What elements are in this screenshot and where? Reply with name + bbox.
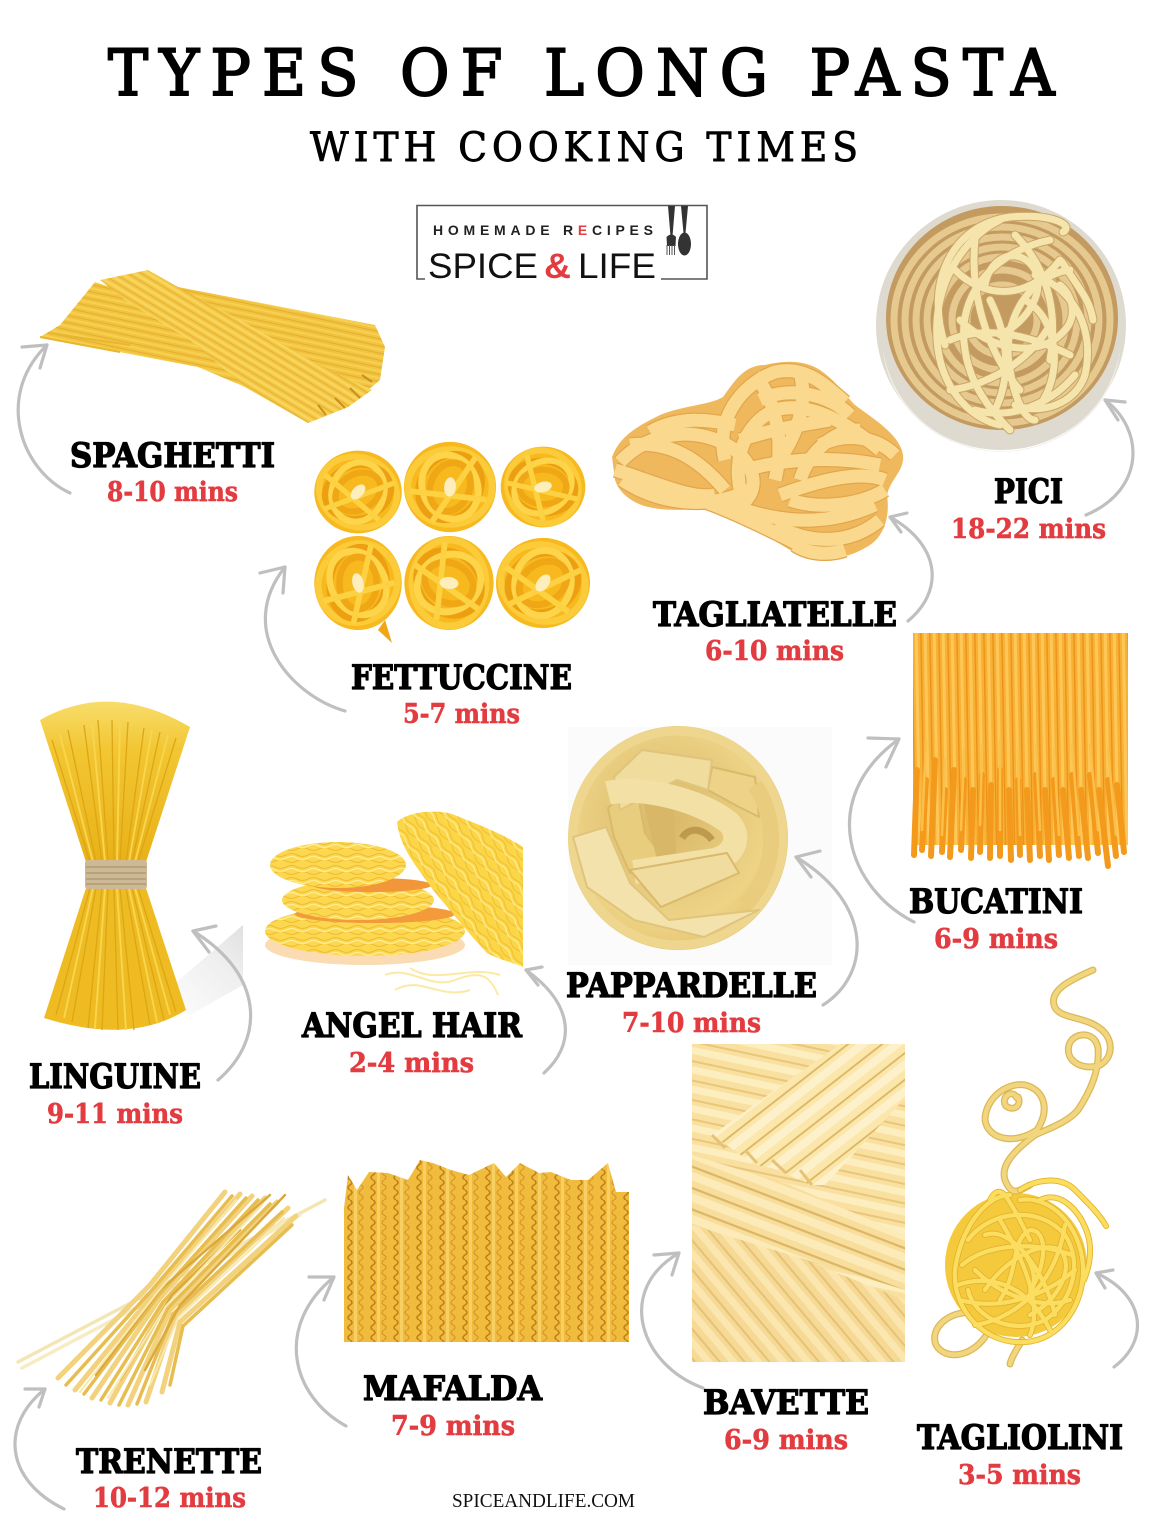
panel: trenette bbox=[15, 1192, 325, 1514]
label: fettuccine: FETTUCCINE bbox=[351, 658, 572, 698]
arrow to fettuccine bbox=[260, 567, 345, 711]
time: mafalda: 7-9 mins bbox=[391, 1411, 515, 1442]
label: linguine: LINGUINE bbox=[29, 1057, 201, 1097]
panel: fettuccine bbox=[260, 423, 609, 730]
time: pici: 18-22 mins bbox=[951, 514, 1106, 545]
label: tagliatelle: TAGLIATELLE bbox=[653, 595, 897, 635]
panel: pappardelle bbox=[566, 726, 857, 1039]
image: pappardelle nest bbox=[568, 726, 832, 965]
label: spaghetti: SPAGHETTI bbox=[70, 436, 275, 476]
panel: bucatini bbox=[849, 633, 1128, 955]
arrow to bucatini bbox=[849, 738, 914, 922]
panel: spaghetti bbox=[18, 270, 385, 508]
panel: tagliolini bbox=[917, 970, 1137, 1491]
logo: Spice and Life: SPICE bbox=[428, 247, 538, 286]
image: tagliatelle nest bbox=[612, 362, 903, 560]
label: bucatini: BUCATINI bbox=[909, 882, 1083, 922]
arrow to bavette bbox=[642, 1253, 703, 1388]
logo: Spice and Life: HOMEMADE R E CIPES bbox=[433, 222, 653, 238]
panel: linguine bbox=[29, 702, 251, 1130]
label: angel hair: ANGEL HAIR bbox=[301, 1006, 523, 1046]
arrow to pici bbox=[1086, 400, 1133, 515]
panel: pici bbox=[876, 200, 1133, 545]
image: angel hair nests bbox=[265, 812, 523, 995]
time: tagliatelle: 6-10 mins bbox=[705, 636, 844, 667]
label: bavette: BAVETTE bbox=[703, 1383, 869, 1423]
image: fettuccine nests bbox=[289, 423, 609, 657]
footer website: SPICEANDLIFE.COM bbox=[452, 1490, 635, 1512]
panel: mafalda bbox=[296, 1160, 629, 1442]
time: bavette: 6-9 mins bbox=[724, 1425, 848, 1456]
image: bucatini strands bbox=[913, 633, 1128, 866]
arrow to linguine bbox=[193, 926, 251, 1080]
arrow to trenette bbox=[15, 1389, 64, 1509]
image: trenette strands bbox=[18, 1192, 325, 1405]
label: pici: PICI bbox=[994, 472, 1063, 512]
time: bucatini: 6-9 mins bbox=[934, 924, 1058, 955]
label: mafalda: MAFALDA bbox=[363, 1369, 543, 1409]
arrow to tagliatelle bbox=[890, 513, 932, 621]
subtitle: WITH COOKING TIMES bbox=[310, 125, 858, 171]
image: spaghetti bundle bbox=[40, 270, 385, 423]
time: angel hair: 2-4 mins bbox=[349, 1048, 474, 1079]
time: spaghetti: 8-10 mins bbox=[107, 477, 238, 508]
panel: angel hair bbox=[265, 812, 565, 1079]
arrow to tagliolini bbox=[1096, 1270, 1137, 1367]
image: mafalda ribbons bbox=[344, 1160, 629, 1342]
panel: tagliatelle bbox=[612, 362, 932, 667]
image: pici in a bowl bbox=[876, 200, 1126, 452]
arrow to pappardelle bbox=[796, 851, 857, 1005]
time: tagliolini: 3-5 mins bbox=[958, 1460, 1081, 1491]
title: TYPES OF LONG PASTA bbox=[108, 35, 1056, 110]
image: bavette close-up bbox=[692, 1044, 905, 1362]
logo: Spice and Life: LIFE bbox=[578, 247, 656, 286]
image: linguine bundle bbox=[40, 702, 243, 1030]
arrow to mafalda bbox=[296, 1277, 346, 1426]
arrow to spaghetti bbox=[18, 345, 70, 493]
logo: Spice and Life: & bbox=[544, 247, 571, 286]
time: pappardelle: 7-10 mins bbox=[622, 1008, 761, 1039]
label: trenette: TRENETTE bbox=[76, 1442, 262, 1482]
panel: bavette bbox=[642, 1044, 905, 1456]
label: pappardelle: PAPPARDELLE bbox=[566, 966, 817, 1006]
time: trenette: 10-12 mins bbox=[93, 1483, 246, 1514]
image: tagliolini nest with loose strand bbox=[935, 970, 1110, 1364]
arrow to angel hair bbox=[526, 967, 565, 1073]
label: tagliolini: TAGLIOLINI bbox=[917, 1418, 1123, 1458]
logo: Spice and Life bbox=[417, 206, 707, 286]
time: linguine: 9-11 mins bbox=[47, 1099, 183, 1130]
time: fettuccine: 5-7 mins bbox=[403, 699, 520, 730]
